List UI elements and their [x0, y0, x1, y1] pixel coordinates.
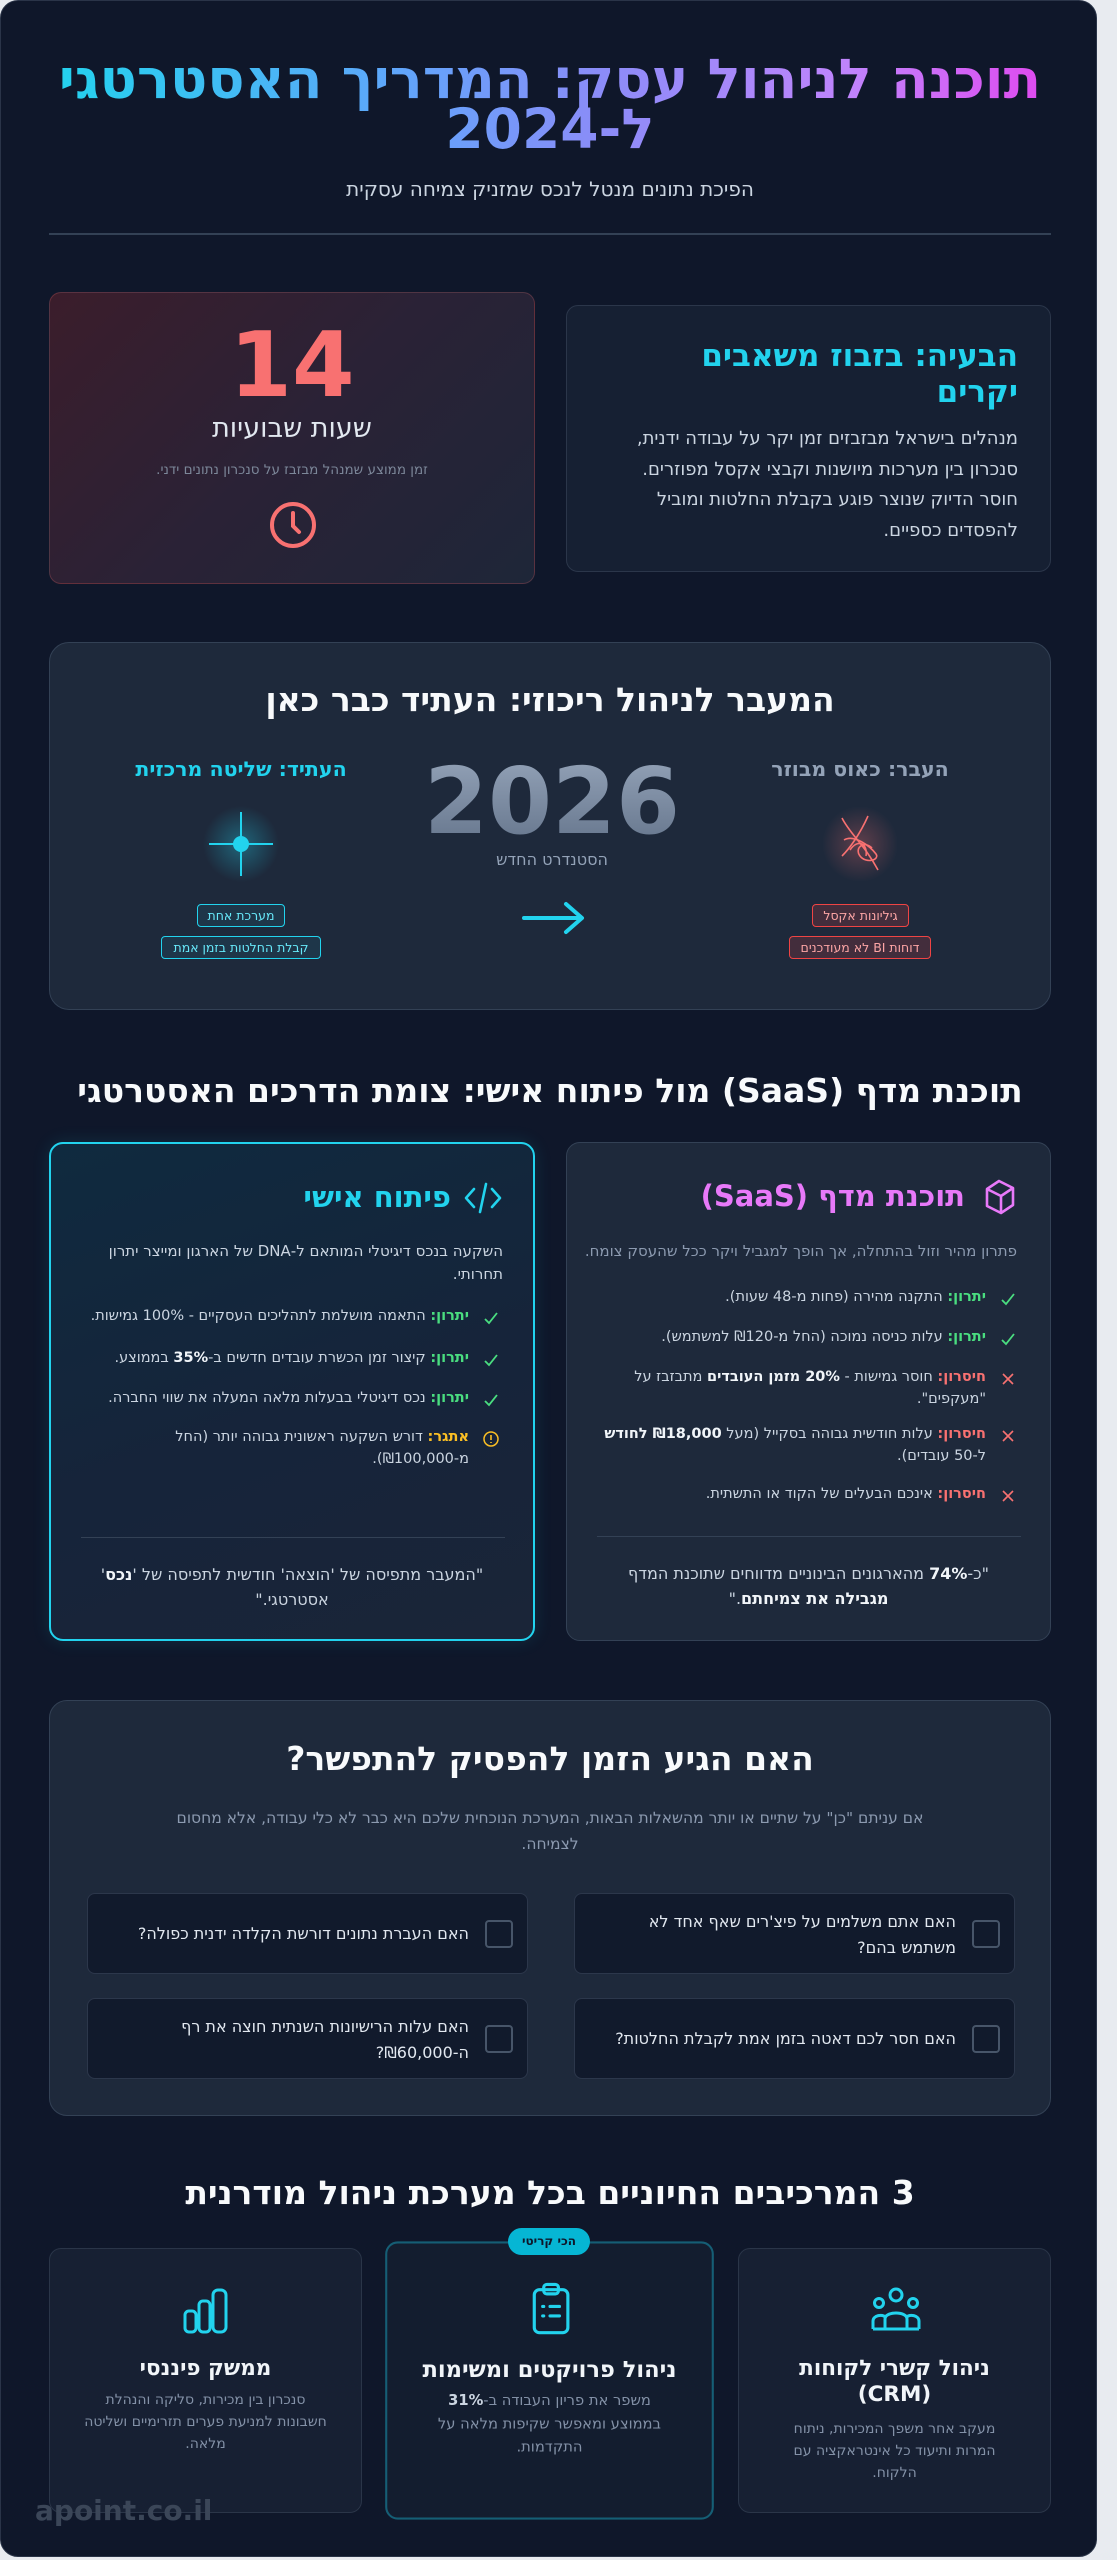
SaaS quote: מגבילה את צמיחתם." — [729, 1589, 888, 1608]
center: 2026 — [424, 748, 680, 934]
past heading: העבר: כאוס מבוזר — [771, 757, 949, 781]
year caption: הסטנדרט החדש — [496, 850, 608, 869]
SaaS list: יתרון: התקנה מהירה (פחות מ-48 שעות). — [725, 1289, 986, 1305]
problem heading — [701, 338, 1018, 410]
projects title: ניהול פרויקטים ומשימות — [422, 2357, 677, 2383]
question 4: ה-₪60,000? — [376, 2043, 469, 2062]
panel: custom development — [49, 1142, 535, 1641]
tag: excel: גיליונות אקסל — [823, 908, 898, 923]
column: past — [771, 757, 949, 959]
SaaS list: חיסרון: עלות חודשית גבוהה בסקייל (מעל ₪18,000 לחודש — [604, 1426, 986, 1442]
icon: bar chart — [184, 2288, 228, 2334]
transition heading: המעבר לניהול ריכוזי: העתיד כבר כאן — [265, 680, 835, 719]
custom heading: פיתוח אישי — [303, 1180, 451, 1214]
SaaS list: חיסרון: אינכם הבעלים של הקוד או התשתית. — [706, 1486, 986, 1502]
checklist description: אם עניתם "כן" על שתיים או יותר מהשאלות הבאות, המערכת הנוכחית שלכם היא כבר לא כלי עבודה, אלא מחסום — [177, 1809, 923, 1827]
tag: BI reports — [789, 936, 931, 959]
finance text: מלאה. — [185, 2436, 226, 2452]
problem text: חוסר הדיוק שנוצר פוגע בקבלת החלטות ומוביל — [657, 489, 1018, 510]
CRM text: המרות ותיעוד כל אינטראקציה עם — [793, 2443, 996, 2459]
question 2 — [87, 1893, 528, 1974]
stat label: שעות שבועיות — [212, 413, 372, 444]
watermark: apoint.co.il — [35, 2494, 212, 2527]
problem text: סנכרון בין מערכות מיושנות וקבצי אקסל מפוזרים. — [642, 458, 1018, 480]
CRM text: הלקוח. — [872, 2465, 917, 2481]
checklist heading: האם הגיע הזמן להפסיק להתפשר? — [286, 1739, 814, 1778]
custom description: השקעה בנכס דיגיטלי המותאם ל-DNA של הארגון ומייצר יתרון — [109, 1242, 503, 1260]
SaaS quote: "כ-74% מהארגונים הבינוניים מדווחים שתוכנת המדף — [628, 1564, 989, 1583]
custom list: מ-₪100,000). — [372, 1451, 469, 1467]
custom list: יתרון: נכס דיגיטלי בבעלות מלאה המעלה את שווי החברה. — [108, 1390, 469, 1406]
tag: real time: קבלת החלטות בזמן אמת — [173, 940, 308, 955]
custom quote: אסטרטגי." — [255, 1590, 329, 1609]
question 4: האם עלות הרישיונות השנתית חוצה את רף — [181, 2017, 469, 2036]
future heading: העתיד: שליטה מרכזית — [135, 757, 347, 781]
custom description: תחרותי. — [453, 1265, 503, 1283]
icon: crosshair — [208, 811, 274, 877]
checklist description: לצמיחה. — [521, 1835, 579, 1853]
problem heading: יקרים — [937, 374, 1018, 410]
CRM title: (CRM) — [858, 2382, 931, 2407]
CRM title — [799, 2356, 990, 2407]
finance text: סנכרון בין מכירות, סליקה והנהלת — [106, 2392, 306, 2408]
checklist description — [177, 1809, 923, 1853]
custom list: יתרון: קיצור זמן הכשרת עובדים חדשים ב-35% בממוצע. — [114, 1350, 469, 1366]
panel: transition — [49, 642, 1051, 1010]
finance title: ממשק פיננסי — [140, 2356, 271, 2381]
SaaS list: "מעקפים". — [917, 1391, 986, 1407]
CRM text: מעקב אחר משפך המכירות, ניתוח — [794, 2421, 995, 2437]
badge: most critical — [508, 2228, 590, 2255]
problem text: להפסדים כספיים. — [883, 520, 1018, 540]
SaaS heading: תוכנת מדף (SaaS) — [701, 1179, 965, 1213]
SaaS list — [604, 1289, 1015, 1502]
heading: components: 3 המרכיבים החיוניים בכל מערכת ניהול מודרנית — [185, 2173, 915, 2212]
CRM title: ניהול קשרי לקוחות — [799, 2356, 990, 2381]
panel: stat 14 hours — [49, 292, 535, 584]
arrow — [522, 902, 584, 934]
year: 2026 — [424, 748, 680, 855]
stat caption: זמן ממוצע שמנהל מבזבז על סנכרון נתונים ידני. — [156, 462, 428, 478]
icon: clock — [270, 502, 316, 548]
stat number: 14 — [229, 313, 355, 418]
badge: most critical: הכי קריטי — [522, 2234, 576, 2248]
subtitle: הפיכת נתונים מנטל לנכס שמזניק צמיחה עסקית — [346, 177, 754, 201]
projects text: התקדמות. — [516, 2439, 583, 2456]
SaaS quote — [628, 1564, 989, 1608]
panel: checklist — [49, 1700, 1051, 2116]
heading: comparison: תוכנת מדף (SaaS) מול פיתוח אישי: צומת הדרכים האסטרטגי — [77, 1071, 1023, 1110]
question 3: האם חסר לכם דאטה בזמן אמת לקבלת החלטות? — [615, 2029, 956, 2048]
question 1 — [574, 1893, 1015, 1974]
tag: real time — [161, 936, 321, 959]
tag: one system: מערכת אחת — [208, 908, 274, 923]
custom quote: "המעבר מתפיסה של 'הוצאה' חודשית לתפיסה של 'נכס' — [101, 1565, 483, 1584]
title: תוכנה לניהול עסק: המדריך האסטרטגי — [59, 47, 1041, 111]
projects text — [438, 2393, 661, 2456]
projects text: בממוצע ומאפשר שקיפות מלאה על — [438, 2416, 661, 2432]
card: CRM — [738, 2248, 1051, 2513]
card: projects — [385, 2241, 714, 2520]
custom description — [109, 1242, 503, 1283]
SaaS description: פתרון מהיר וזול בהתחלה, אך הופך למגביל ויקר ככל שהעסק צומח. — [585, 1242, 1017, 1260]
problem text: מנהלים בישראל מבזבזים זמן יקר על עבודה ידנית, — [637, 428, 1018, 449]
icon: code — [464, 1182, 502, 1214]
custom list: יתרון: התאמה מושלמת לתהליכים העסקיים - 100% גמישות. — [91, 1308, 469, 1324]
card: finance — [49, 2248, 362, 2513]
custom list — [91, 1308, 499, 1467]
tag: one system — [197, 904, 285, 927]
SaaS list: חיסרון: חוסר גמישות - 20% מזמן העובדים מתבזבז על — [634, 1369, 986, 1385]
projects text: משפר את פריון העבודה ב-31% — [448, 2393, 651, 2409]
SaaS list: ל-50 עובדים). — [897, 1448, 986, 1464]
icon: package — [986, 1180, 1014, 1214]
panel: problem — [566, 305, 1051, 572]
column: future — [135, 757, 347, 959]
problem heading: הבעיה: בזבוז משאבים — [701, 338, 1018, 374]
icon: chaos scribble — [827, 811, 893, 877]
question 4 — [87, 1998, 528, 2079]
tag: BI reports: דוחות BI לא מעודכנים — [801, 940, 919, 955]
CRM text — [793, 2421, 996, 2481]
question 1: האם אתם משלמים על פיצ'רים שאף אחד לא — [649, 1912, 956, 1931]
custom list: אתגר: דורש השקעה ראשונית גבוהה יותר (החל — [175, 1429, 469, 1445]
SaaS list: יתרון: עלות כניסה נמוכה (החל מ-₪120 למשתמש). — [661, 1329, 986, 1345]
title — [49, 54, 1051, 154]
finance text: חשבונות למניעת פערים תזרימיים ושליטה — [84, 2414, 327, 2430]
custom quote — [101, 1565, 483, 1609]
question 3 — [574, 1998, 1015, 2079]
question 1: משתמש בהם? — [857, 1938, 956, 1957]
panel: SaaS — [566, 1142, 1051, 1641]
icon: clipboard — [532, 2282, 570, 2334]
problem text — [637, 428, 1018, 540]
icon: users — [872, 2288, 920, 2330]
finance text — [84, 2392, 327, 2452]
title: ל-2024 — [445, 97, 655, 161]
tag: excel — [812, 904, 909, 927]
question 2: האם העברת נתונים דורשת הקלדה ידנית כפולה? — [138, 1924, 469, 1943]
